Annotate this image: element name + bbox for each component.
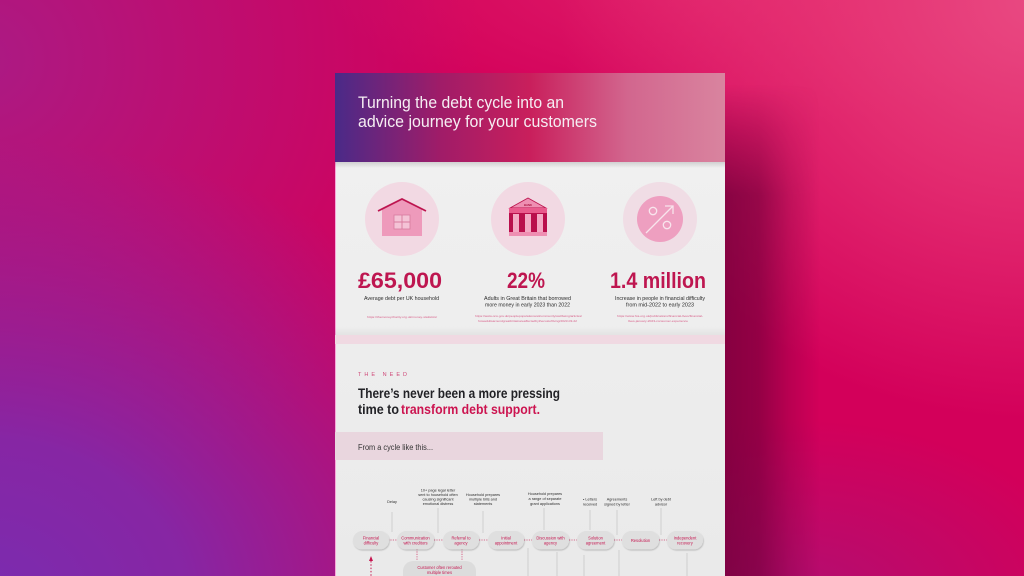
page drop shadow	[725, 96, 811, 576]
stage annotations: Household prepares	[528, 492, 562, 496]
pill: discussion with agency: agency	[544, 540, 558, 546]
title: advice journey for your customers	[358, 113, 597, 131]
stage annotations: Left by debt	[651, 498, 672, 502]
pill: solution agreement: agreement	[586, 540, 606, 546]
stage annotations: a range of separate	[529, 497, 561, 501]
arrow: dotted return to start	[369, 556, 373, 576]
section divider strip	[335, 327, 725, 344]
stat: financial difficulty	[610, 268, 706, 323]
pill: referral to agency: Referral to	[451, 536, 471, 540]
pill: financial difficulty: difficulty	[364, 540, 379, 546]
pill: referral to agency: agency	[454, 540, 469, 546]
pill: resolution	[622, 531, 659, 550]
stage annotations: multiple bills and	[469, 498, 497, 502]
pill: communication with creditors: with creditors	[403, 540, 428, 546]
pill: solution agreement: Solution	[588, 536, 604, 540]
stage annotations: statements	[474, 502, 492, 506]
pill: customer often rerouted	[403, 561, 476, 576]
stat: average debt: https://themoneycharity.org.uk/money-statistics/	[367, 315, 437, 319]
pill: initial appointment	[488, 531, 524, 550]
section: the need heading: transform debt support.	[401, 402, 540, 417]
stage annotations: causing significant	[422, 498, 454, 502]
stage annotations: signed by letter	[604, 502, 631, 506]
stage annotations: Household prepares	[466, 493, 500, 497]
pill: resolution: Resolution	[631, 538, 651, 543]
band: from a cycle like this: From a cycle like this...	[358, 443, 433, 452]
icon: percent with rising arrow	[623, 182, 697, 256]
stat: average debt: £65,000	[358, 268, 442, 293]
stat: adults borrowing: more money in early 2023 than 2022	[485, 302, 570, 308]
pill: financial difficulty: Financial	[363, 536, 379, 540]
stage annotations	[387, 488, 687, 576]
stage annotations: advisor	[655, 502, 668, 506]
dotted connectors	[388, 540, 667, 561]
pill: discussion with agency	[532, 531, 569, 550]
title	[358, 94, 597, 131]
icon: house	[365, 182, 439, 256]
stat: financial difficulty: lives-january-2023-consumer-experience	[628, 319, 688, 323]
panel: header banner	[335, 73, 725, 168]
pill: customer often rerouted: multiple times	[427, 570, 452, 575]
pill: initial appointment: Initial	[501, 536, 511, 540]
stat: adults borrowing: howadultsaroundgreatbritainareaffectedbythecostofliving/2023-03-22	[478, 319, 577, 323]
stage annotations: Agreements	[607, 498, 627, 502]
stage annotations: emotional distress	[423, 502, 453, 506]
pill: referral to agency	[443, 531, 479, 550]
stage annotations: grant applications	[530, 502, 560, 506]
stage annotations: Delay	[387, 500, 397, 504]
panel: infographic page	[335, 73, 725, 576]
stat: financial difficulty: https://www.fca.org.uk/publications/financial-lives/financial-	[617, 314, 703, 318]
stat: financial difficulty: from mid-2022 to early 2023	[626, 302, 694, 308]
stage annotations: • Letters	[583, 498, 597, 502]
pill: communication with creditors: Communication	[401, 536, 430, 540]
section: the need heading	[358, 372, 560, 417]
section: the need heading: time to	[358, 402, 399, 417]
stat: financial difficulty: Increase in people in financial difficulty	[615, 296, 705, 302]
pill: customer often rerouted: Customer often rerouted	[417, 565, 462, 570]
stage annotations: sent to household often	[418, 493, 458, 497]
stat: adults borrowing	[475, 268, 582, 323]
pill: initial appointment: appointment	[495, 540, 518, 546]
pill: financial difficulty	[353, 531, 389, 550]
pill: discussion with agency: Discussion with	[536, 536, 565, 540]
stat: adults borrowing: https://www.ons.gov.uk/peoplepopulationandcommunity/wellbeing/articles/	[475, 314, 582, 318]
band: from a cycle like this	[335, 432, 603, 460]
title: Turning the debt cycle into an	[358, 94, 564, 112]
stat: adults borrowing: Adults in Great Britain that borrowed	[484, 296, 571, 302]
stat: adults borrowing: 22%	[507, 268, 545, 293]
stage annotations: received	[583, 502, 597, 506]
flow: debt cycle	[353, 488, 703, 576]
icon: bank	[491, 182, 565, 256]
stat: financial difficulty: 1.4 million	[610, 268, 706, 293]
pill: independent recovery: Independent	[674, 536, 697, 540]
section: the need heading: THE NEED	[358, 372, 407, 378]
stat: average debt	[358, 268, 442, 319]
stat: average debt: Average debt per UK household	[364, 296, 439, 302]
pill: communication with creditors	[397, 531, 434, 550]
stage annotations: 10+ page legal letter	[421, 488, 456, 492]
icon: bank: BANK	[524, 203, 532, 207]
pill: independent recovery	[667, 531, 703, 550]
pill: independent recovery: recovery	[677, 540, 694, 546]
pill: solution agreement	[577, 531, 614, 550]
section: the need heading: There’s never been a more pressing	[358, 386, 560, 401]
